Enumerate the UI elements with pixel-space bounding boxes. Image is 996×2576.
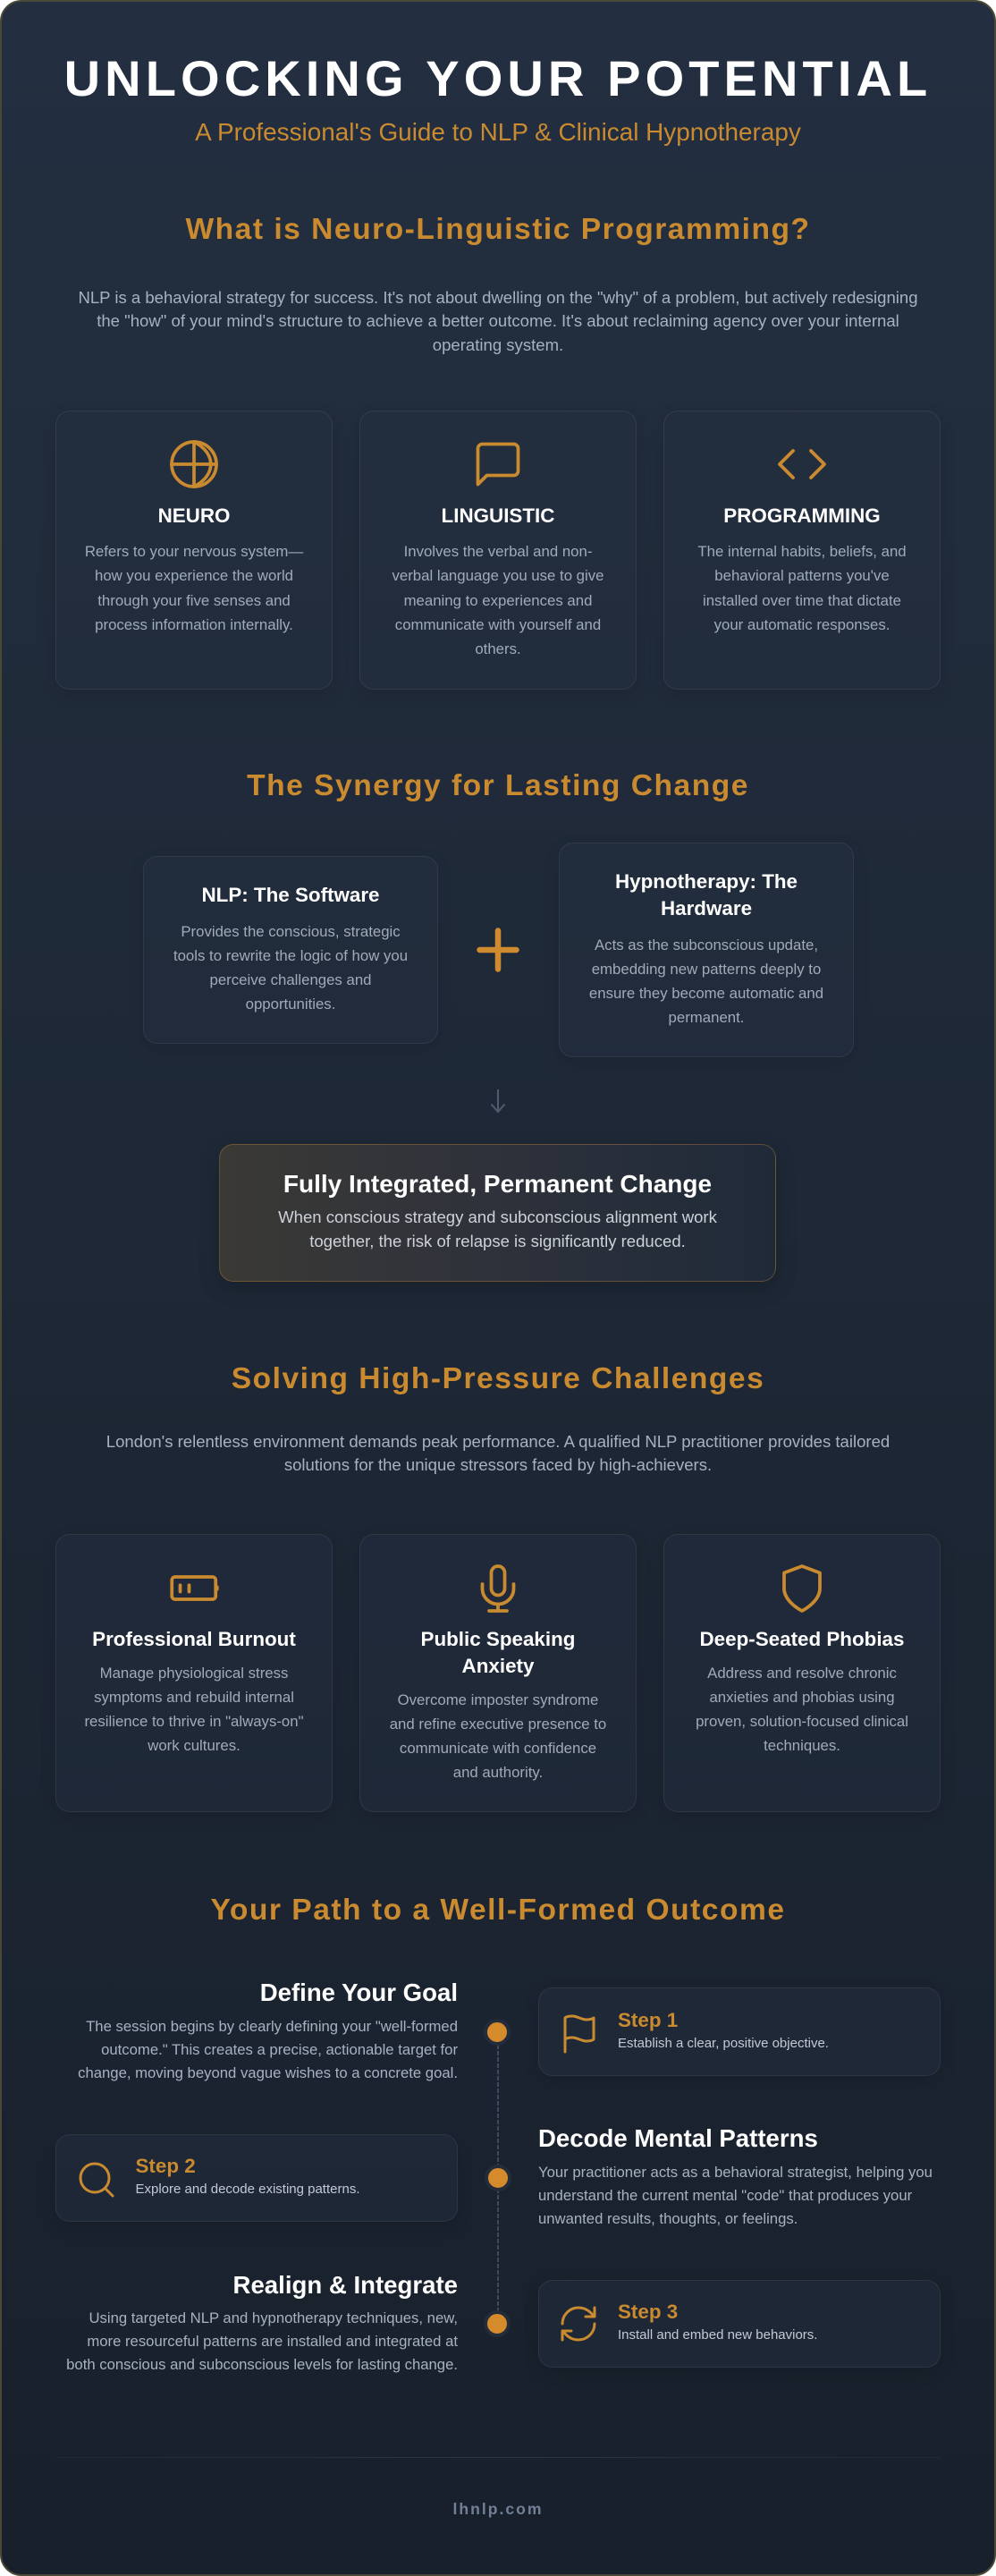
heading: public speaking: Anxiety <box>462 1655 534 1677</box>
text: programming: The internal habits, beliefs, and <box>697 543 907 560</box>
text block: challenges intro <box>106 1432 890 1474</box>
panel: step 1 <box>538 1987 941 2076</box>
heading: what is NLP: What is Neuro-Linguistic Programming? <box>185 213 811 246</box>
text: burnout: resilience to thrive in "always-on" <box>84 1713 304 1730</box>
heading: hypnotherapy hardware: Hypnotherapy: The <box>615 870 798 893</box>
text block: challenges intro: London's relentless environment demands peak performance. A qualified NLP practitioner provides tailored <box>106 1432 890 1451</box>
text: programming: behavioral patterns you've <box>714 567 890 584</box>
text: define your goal: change, moving beyond vague wishes to a concrete goal. <box>78 2064 458 2081</box>
text block: NLP intro <box>78 288 918 354</box>
text: neuro: through your five senses and <box>97 592 291 609</box>
text: linguistic: others. <box>475 640 521 657</box>
icon: microphone <box>481 1564 515 1613</box>
text: integrated change: When conscious strategy and subconscious alignment work <box>278 1208 717 1226</box>
text: decode mental patterns: understand the current mental "code" that produces your <box>538 2187 912 2204</box>
text: decode mental patterns <box>538 2164 933 2227</box>
panel: integrated change callout <box>219 1144 776 1282</box>
heading: linguistic: LINGUISTIC <box>442 504 554 527</box>
text: burnout: work cultures. <box>148 1737 241 1754</box>
icon: shield <box>782 1564 822 1613</box>
icon: battery <box>170 1575 219 1601</box>
text: programming: your automatic responses. <box>714 616 890 633</box>
text: realign and integrate: Using targeted NLP and hypnotherapy techniques, new, <box>89 2309 458 2326</box>
text: hypnotherapy hardware: ensure they become automatic and <box>589 985 823 1002</box>
subtitle: A Professional's Guide to NLP & Clinical Hypnotherapy <box>195 118 801 146</box>
text: phobias: techniques. <box>764 1737 840 1754</box>
text block: challenges intro: solutions for the unique stressors faced by high-achievers. <box>284 1455 712 1474</box>
text: NLP software: opportunities. <box>246 996 335 1013</box>
text: define your goal: outcome." This creates a precise, actionable target for <box>101 2041 458 2058</box>
text: phobias: proven, solution-focused clinical <box>696 1713 908 1730</box>
heading: public speaking: Public Speaking <box>421 1628 575 1650</box>
text block: decode mental patterns <box>538 2124 933 2227</box>
icon: magnifier <box>79 2163 114 2198</box>
panel: step 2 <box>55 2134 458 2222</box>
heading: burnout: Professional Burnout <box>92 1628 296 1650</box>
icon: speech bubble <box>476 442 520 487</box>
text: programming <box>697 543 907 633</box>
heading: phobias: Deep-Seated Phobias <box>700 1628 904 1650</box>
text: phobias: anxieties and phobias using <box>709 1689 895 1706</box>
text: hypnotherapy hardware: embedding new patterns deeply to <box>592 961 821 978</box>
text: NLP software: tools to rewrite the logic of how you <box>173 947 408 964</box>
text: define your goal <box>78 2018 458 2081</box>
text block: realign and integrate <box>66 2271 458 2373</box>
heading: decode mental patterns: Decode Mental Patterns <box>538 2124 818 2152</box>
heading: realign and integrate: Realign & Integrate <box>233 2271 458 2299</box>
text: realign and integrate: more resourceful patterns are installed and integrated at <box>87 2333 458 2350</box>
label: step 1: Step 1 <box>618 2009 678 2031</box>
timeline dot 1 <box>484 2019 511 2046</box>
heading: hypnotherapy hardware: Hardware <box>661 897 752 919</box>
text: integrated change: together, the risk of relapse is significantly reduced. <box>309 1232 686 1250</box>
text: neuro: process information internally. <box>95 616 293 633</box>
text: linguistic: verbal language you use to give <box>392 567 604 584</box>
heading: NLP software: NLP: The Software <box>201 884 380 906</box>
text block: NLP intro: NLP is a behavioral strategy for success. It's not about dwelling on the "why" of a problem, but actively redesigning <box>78 288 918 307</box>
panel: burnout <box>55 1534 333 1812</box>
text: linguistic: communicate with yourself and <box>395 616 601 633</box>
text: public speaking <box>390 1691 606 1781</box>
text: integrated change <box>278 1208 717 1250</box>
heading: neuro: NEURO <box>158 504 230 527</box>
text: linguistic: meaning to experiences and <box>404 592 592 609</box>
panel: NLP software <box>143 856 438 1044</box>
text: burnout: Manage physiological stress <box>100 1665 288 1682</box>
footer: website: lhnlp.com <box>452 2500 544 2518</box>
text: programming: installed over time that dictate <box>703 592 901 609</box>
text: neuro <box>85 543 304 633</box>
text: burnout <box>84 1665 304 1754</box>
heading: path: Your Path to a Well-Formed Outcome <box>210 1893 786 1927</box>
panel: step 3 <box>538 2280 941 2368</box>
text block: NLP intro: the "how" of your mind's structure to achieve a better outcome. It's about reclaiming agency over your internal <box>97 311 899 330</box>
text: hypnotherapy hardware: Acts as the subconscious update, <box>595 936 818 953</box>
heading: public speaking <box>421 1628 575 1677</box>
text: public speaking: communicate with confidence <box>400 1740 596 1757</box>
text block: define your goal <box>78 1979 458 2081</box>
panel: programming <box>663 411 941 690</box>
icon: globe <box>170 440 218 488</box>
heading: synergy: The Synergy for Lasting Change <box>247 769 749 802</box>
label: step 3: Step 3 <box>618 2301 678 2323</box>
timeline dot 3 <box>484 2310 511 2337</box>
panel: phobias <box>663 1534 941 1812</box>
heading: hypnotherapy hardware <box>615 870 798 919</box>
text: define your goal: The session begins by clearly defining your "well-formed <box>86 2018 458 2035</box>
text: neuro: how you experience the world <box>95 567 293 584</box>
text: NLP software <box>173 923 408 1013</box>
text: burnout: symptoms and rebuild internal <box>94 1689 294 1706</box>
icon: flag <box>563 2014 595 2054</box>
timeline line <box>497 2045 499 2311</box>
text: realign and integrate <box>66 2309 458 2373</box>
title: UNLOCKING YOUR POTENTIAL <box>64 50 932 106</box>
heading: integrated change: Fully Integrated, Permanent Change <box>283 1170 712 1198</box>
arrow: down <box>490 1089 506 1113</box>
text: linguistic: Involves the verbal and non- <box>404 543 592 560</box>
text: decode mental patterns: unwanted results, thoughts, or feelings. <box>538 2210 798 2227</box>
panel: hypnotherapy hardware <box>559 843 854 1057</box>
text: phobias <box>696 1665 908 1754</box>
icon: plus <box>477 928 519 972</box>
text: public speaking: Overcome imposter syndrome <box>398 1691 598 1708</box>
text: step 2: Explore and decode existing patterns. <box>136 2182 359 2197</box>
icon: code brackets <box>778 449 826 479</box>
text: step 1: Establish a clear, positive objective. <box>618 2036 829 2051</box>
heading: define your goal: Define Your Goal <box>260 1979 458 2006</box>
label: step 2: Step 2 <box>136 2155 196 2177</box>
text block: NLP intro: operating system. <box>433 335 563 354</box>
text: step 3: Install and embed new behaviors. <box>618 2327 817 2343</box>
panel: neuro <box>55 411 333 690</box>
text: phobias: Address and resolve chronic <box>707 1665 897 1682</box>
text: decode mental patterns: Your practitioner acts as a behavioral strategist, helping you <box>538 2164 933 2181</box>
text: public speaking: and refine executive presence to <box>390 1716 606 1733</box>
text: hypnotherapy hardware <box>589 936 823 1026</box>
text: NLP software: Provides the conscious, strategic <box>181 923 401 940</box>
panel: public speaking <box>359 1534 637 1812</box>
heading: programming: PROGRAMMING <box>723 504 881 527</box>
text: neuro: Refers to your nervous system— <box>85 543 303 560</box>
text: hypnotherapy hardware: permanent. <box>669 1009 744 1026</box>
icon: rotate arrows <box>561 2306 596 2342</box>
text: realign and integrate: both conscious and subconscious levels for lasting change. <box>66 2356 458 2373</box>
heading: challenges: Solving High-Pressure Challenges <box>232 1362 764 1395</box>
timeline dot 2 <box>485 2165 511 2191</box>
text: linguistic <box>392 543 604 657</box>
text: NLP software: perceive challenges and <box>209 971 372 988</box>
text: public speaking: and authority. <box>453 1764 543 1781</box>
panel: linguistic <box>359 411 637 690</box>
